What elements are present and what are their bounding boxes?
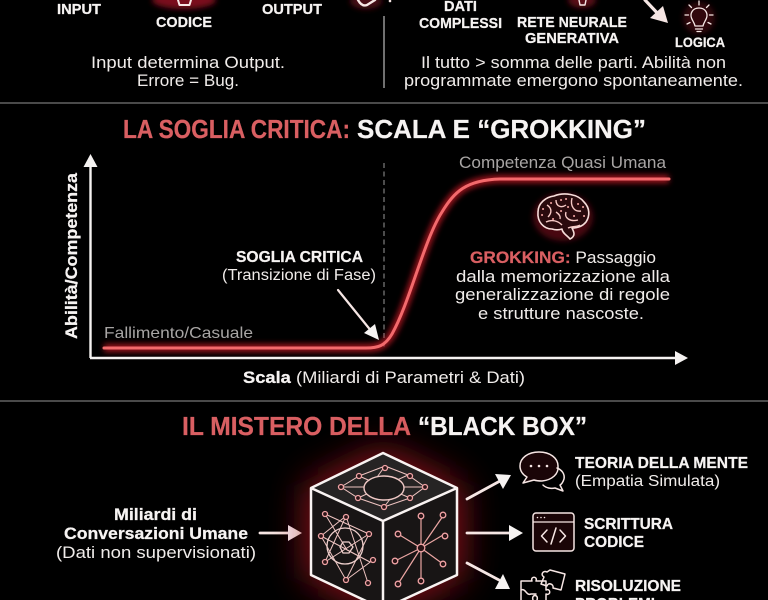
arrow: to problem solving bbox=[467, 563, 510, 589]
text: grokking explanation: e strutture nascoste. bbox=[478, 304, 644, 323]
panel: deterministic programming bbox=[57, 0, 322, 90]
output: problem solving: RISOLUZIONE bbox=[575, 578, 681, 595]
arrow: to threshold bbox=[338, 290, 379, 340]
text: grokking explanation bbox=[455, 248, 671, 323]
text: deterministic caption: Input determina Output. bbox=[91, 54, 285, 72]
label: x axis: Scala (Miliardi di Parametri & Dati) bbox=[243, 369, 525, 387]
callout: critical threshold: (Transizione di Fase) bbox=[222, 267, 376, 284]
text: deterministic caption bbox=[91, 54, 285, 90]
icon: network fragment bbox=[568, 0, 596, 8]
heading: il mistero della black box: “BLACK BOX” bbox=[418, 411, 587, 441]
heading: la soglia critica: SCALA E “GROKKING” bbox=[357, 114, 646, 144]
text: grokking explanation: dalla memorizzazione alla bbox=[456, 267, 671, 286]
arrow: to theory of mind bbox=[467, 474, 511, 499]
icon: black box cube bbox=[306, 448, 462, 600]
label: output: OUTPUT bbox=[262, 1, 322, 18]
arrow: data into box bbox=[260, 525, 302, 541]
label: failure region: Fallimento/Casuale bbox=[104, 325, 253, 342]
text: emergence caption: Il tutto > somma delle parti. Abilità non bbox=[421, 54, 726, 72]
heading: la soglia critica: LA SOGLIA CRITICA: bbox=[123, 114, 350, 144]
cube glow bbox=[306, 448, 462, 600]
output: code writing: CODICE bbox=[584, 534, 644, 551]
heading: il mistero della black box bbox=[182, 411, 587, 441]
cube edges bbox=[311, 453, 457, 600]
label: y axis: Abilità/Competenza bbox=[63, 172, 81, 339]
chart: scale vs ability curve bbox=[63, 154, 688, 387]
icon: chat bubbles bbox=[520, 452, 564, 491]
heading: il mistero della black box: IL MISTERO DELLA bbox=[182, 411, 411, 441]
axis: horizontal bbox=[90, 351, 688, 365]
callout: critical threshold bbox=[222, 249, 376, 284]
output: theory of mind: (Empatia Simulata) bbox=[575, 473, 720, 490]
arrow: to code writing bbox=[467, 525, 523, 541]
output: code writing bbox=[533, 513, 673, 551]
text: emergence caption: programmate emergono spontaneamente. bbox=[404, 72, 743, 90]
axis: vertical bbox=[84, 154, 98, 358]
label: rete neurale generativa bbox=[517, 14, 627, 47]
icon: light bulb bbox=[683, 1, 715, 34]
output: problem solving bbox=[521, 570, 681, 600]
label: codice: CODICE bbox=[156, 14, 212, 31]
icon: code window bbox=[533, 513, 574, 551]
icon: code fragment bbox=[152, 0, 216, 9]
panel: emergent generative network bbox=[404, 0, 743, 90]
callout: critical threshold: SOGLIA CRITICA bbox=[236, 249, 363, 266]
text: emergence caption bbox=[404, 54, 743, 90]
output: code writing: SCRITTURA bbox=[584, 516, 673, 533]
cube top face bbox=[311, 453, 457, 521]
heading: la soglia critica bbox=[123, 114, 646, 144]
text: grokking explanation: generalizzazione di regole bbox=[455, 285, 670, 304]
label: dati complessi bbox=[419, 0, 502, 32]
text: grokking explanation: GROKKING: Passaggio bbox=[470, 248, 656, 267]
arrow: to logic bbox=[645, 0, 668, 23]
output: theory of mind: TEORIA DELLA MENTE bbox=[575, 455, 748, 472]
icon: puzzle pieces bbox=[521, 570, 565, 600]
text: deterministic caption: Errore = Bug. bbox=[137, 72, 239, 90]
label: rete neurale generativa: RETE NEURALE bbox=[517, 14, 627, 31]
output: theory of mind bbox=[520, 452, 748, 491]
cube right face bbox=[383, 488, 457, 600]
label: input: INPUT bbox=[57, 1, 101, 18]
text: input data: (Dati non supervisionati) bbox=[56, 544, 256, 562]
icon: check mark fragment bbox=[350, 0, 391, 9]
text: input data: Conversazioni Umane bbox=[64, 525, 248, 543]
label: near-human competence: Competenza Quasi Umana bbox=[459, 154, 667, 172]
label: dati complessi: COMPLESSI bbox=[419, 15, 502, 32]
text: input data: Miliardi di bbox=[114, 506, 197, 524]
icon: brain bbox=[533, 193, 593, 241]
text: input data bbox=[56, 506, 256, 562]
label: logica: LOGICA bbox=[675, 34, 725, 50]
curve glow bbox=[104, 179, 669, 348]
cube left face bbox=[311, 488, 383, 600]
label: rete neurale generativa: GENERATIVA bbox=[525, 30, 619, 47]
curve: competence growth bbox=[104, 179, 669, 348]
